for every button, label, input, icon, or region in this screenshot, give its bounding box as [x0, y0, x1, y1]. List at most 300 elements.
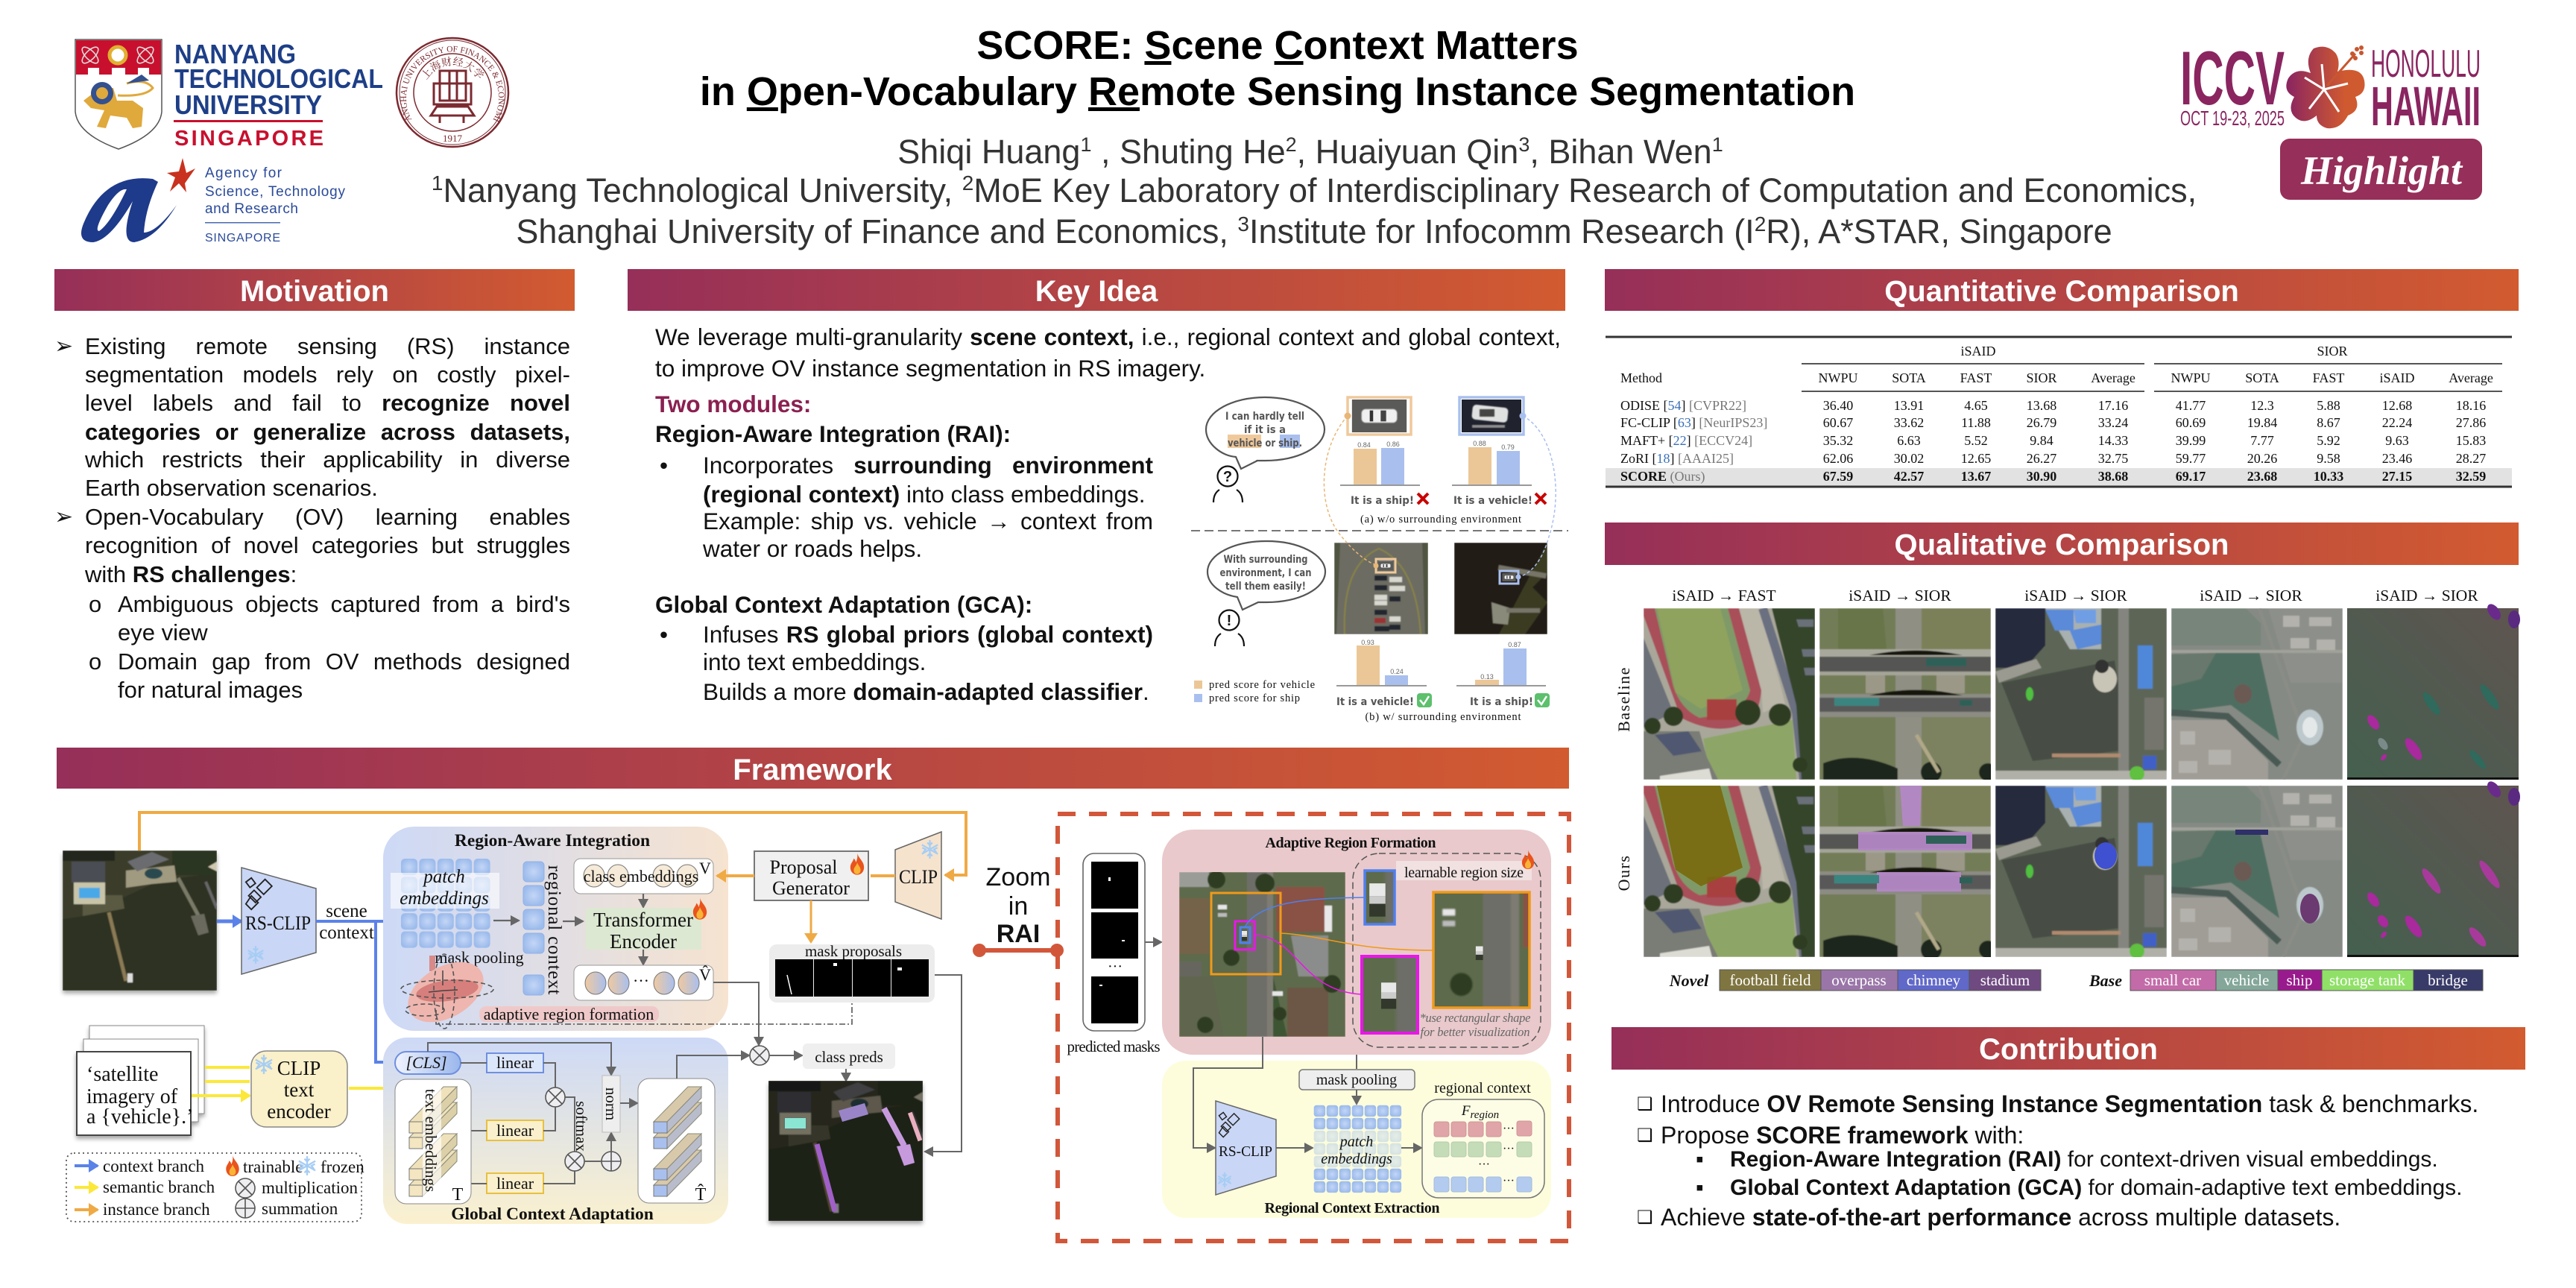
- icon: confident person: !: [1227, 613, 1231, 629]
- arrow: regional to transformer: [563, 921, 583, 922]
- bullet: open vocabulary: with RS challenges:: [85, 561, 297, 587]
- table row: SCORE: [1620, 469, 2486, 484]
- arrow: encoder to GCA: [349, 1087, 396, 1090]
- table row: FC-CLIP: 33.24: [2098, 415, 2128, 430]
- icon: multiply preds: [750, 1046, 769, 1065]
- table column heads: SIOR: [2026, 370, 2057, 385]
- icon: flame: [693, 897, 707, 920]
- table row: MAFT+: 5.52: [1964, 433, 1988, 448]
- table row: ZoRI: 20.26: [2247, 451, 2277, 466]
- table row: MAFT+: 14.33: [2098, 433, 2128, 448]
- ARF title: Adaptive Region Formation: [1266, 835, 1436, 851]
- legend: novel classes: chimney: [1907, 971, 1961, 989]
- legend: operators: summation: [262, 1199, 338, 1218]
- A*STAR mark: [81, 158, 195, 242]
- class embeddings: [574, 859, 713, 894]
- table row: FC-CLIP: 8.67: [2317, 415, 2340, 430]
- bullet: open vocabulary: ➢: [54, 504, 73, 530]
- ICCV wordmark: [2180, 36, 2481, 137]
- intro sentence: to improve OV instance segmentation in RS imagery.: [655, 355, 1205, 382]
- legend: operators: multiplication: [262, 1178, 359, 1197]
- table row: MAFT+: 15.83: [2456, 433, 2486, 448]
- table row: SCORE: 38.68: [2098, 469, 2128, 484]
- verdict: right predictions: It is a vehicle!: [1336, 696, 1414, 708]
- legend: base classes: vehicle: [2224, 971, 2269, 989]
- prompt text: [86, 1063, 193, 1128]
- GCA connectors: [461, 1063, 575, 1184]
- verdict: right predictions: It is a ship!: [1470, 696, 1533, 708]
- F region box: ···: [1503, 1143, 1515, 1155]
- bar chart: context, ship: [1456, 641, 1546, 686]
- table row: ODISE: 41.77: [2176, 398, 2206, 413]
- regional context label: regional context: [544, 865, 564, 995]
- table row: MAFT+: [1620, 433, 2486, 448]
- section header: Quantitative Comparison: Quantitative Comparison: [1884, 275, 2239, 308]
- arrow: proposal to masks: [809, 900, 812, 942]
- arrow: image to RS-CLIP: [217, 920, 242, 923]
- aerial image: [1179, 871, 1345, 1037]
- table row: ZoRI: 9.58: [2317, 451, 2340, 466]
- bullet: existing RS segmentation: which restricts their applicability in diverse: [85, 446, 570, 473]
- NTU wordmark: UNIVERSITY: [174, 89, 322, 120]
- norm block: norm: [602, 1087, 620, 1120]
- crop: medium region: [1201, 819, 1680, 1269]
- text embeddings T: T: [452, 1185, 464, 1205]
- legend: base classes: ship: [2286, 971, 2313, 989]
- arrows: mask pooling: [1356, 1055, 1357, 1104]
- table row: FC-CLIP: 60.69: [2176, 415, 2206, 430]
- row label: Ours: Ours: [1614, 855, 1633, 891]
- yellow arrows: prompt to encoder: [192, 1067, 250, 1096]
- context branch line: [316, 921, 397, 1062]
- linear block 3: [487, 1173, 543, 1193]
- logo: ICCV 2025 Honolulu Hawaii: [2180, 36, 2481, 137]
- speech bubble: hardly tell: I can hardly tell: [1225, 411, 1304, 423]
- predicted masks: [1067, 853, 1160, 1055]
- bullet: open vocabulary: recognition of novel categories but struggles: [85, 532, 570, 558]
- logo: Shanghai University of Finance and Economics seal: [395, 37, 510, 148]
- table column heads: NWPU: [1819, 370, 1857, 385]
- softmax label: softmax: [572, 1101, 590, 1152]
- icon: confident person: [1215, 610, 1244, 646]
- table column heads: [1620, 370, 2493, 385]
- table row: ODISE: 13.91: [1894, 398, 1924, 413]
- bullet: open vocabulary: Open-Vocabulary (OV) learning enables: [85, 504, 570, 530]
- speech bubble: hardly tell: if it is a: [1244, 424, 1286, 436]
- speech bubble: tell easily: [1208, 541, 1325, 610]
- CLIP text encoder: text: [284, 1079, 315, 1101]
- section header: Motivation: [54, 269, 575, 311]
- predicted masks: predicted masks: [1067, 1038, 1160, 1055]
- table row: MAFT+: MAFT+ [22] [ECCV24]: [1620, 433, 1752, 448]
- column heads: iSAID → SIOR: [2375, 587, 2478, 604]
- logo: Nanyang Technological University: [75, 39, 383, 151]
- bar chart: context, car: [1336, 639, 1427, 686]
- highlight badge: Highlight: [2300, 148, 2463, 193]
- GCA description: Infuses RS global priors (global context): [703, 621, 1153, 648]
- table row: FC-CLIP: 11.88: [1961, 415, 1991, 430]
- zoom in RAI label: in: [1008, 892, 1028, 921]
- RAI description: •: [660, 452, 668, 479]
- predicted masks: ···: [1108, 959, 1123, 975]
- dashed region-size frame: [1353, 853, 1541, 1047]
- table row: FC-CLIP: 33.62: [1894, 415, 1924, 430]
- regional context column: [523, 862, 544, 995]
- input image: [63, 850, 217, 991]
- legend: novel classes: overpass: [1831, 971, 1887, 989]
- speech bubble: tell easily: environment, I can: [1219, 567, 1312, 579]
- crop: large region: [1389, 860, 1620, 1096]
- icon: multiply 1: [546, 1087, 565, 1107]
- CLS token: [CLS]: [405, 1053, 447, 1072]
- legend: branches: semantic branch: [103, 1178, 215, 1196]
- table row: ODISE: [1620, 398, 2486, 413]
- patch embeddings grid: [1313, 1105, 1402, 1193]
- table row: ODISE: 4.65: [1964, 398, 1988, 413]
- panel: Region-Aware Integration: [383, 827, 728, 1035]
- table row: ZoRI: [1620, 451, 2486, 466]
- column heads: iSAID → SIOR: [2200, 587, 2302, 604]
- table row: ODISE: 12.3: [2250, 398, 2274, 413]
- table row: ODISE: 18.16: [2456, 398, 2486, 413]
- table column heads: NWPU: [2171, 370, 2211, 385]
- table row: ODISE: 13.68: [2027, 398, 2056, 413]
- arrow: patches to regional: [1401, 1147, 1421, 1149]
- highlight badge: [2280, 139, 2482, 200]
- linear block 1: [487, 1053, 543, 1073]
- linear block 2: [487, 1120, 543, 1140]
- A*STAR wordmark: [205, 165, 346, 244]
- affiliations: [432, 171, 2197, 250]
- patch embeddings grid: patch: [422, 867, 465, 887]
- legend: branches: context branch: [103, 1157, 205, 1175]
- CLIP text encoder: encoder: [267, 1100, 331, 1123]
- NTU shield: [75, 40, 162, 149]
- table row: SCORE: 42.57: [1894, 469, 1924, 484]
- table row: ODISE: 12.68: [2382, 398, 2412, 413]
- chart legend: pred score for vehicle: [1209, 679, 1315, 691]
- RAI description: Region-Aware Integration (RAI):: [655, 420, 1011, 447]
- adapted embeddings: [574, 965, 713, 1000]
- sub-item: GCA: Global Context Adaptation (GCA) for domain-adaptive text embeddings.: [1730, 1175, 2463, 1200]
- bar chart: context, car: 0.93: [1361, 639, 1374, 646]
- A*STAR wordmark: SINGAPORE: [205, 232, 280, 244]
- icon: flame: [1522, 850, 1534, 869]
- verdict: wrong predictions: It is a vehicle!: [1453, 495, 1532, 507]
- legend: trainable and frozen: trainable: [243, 1158, 303, 1176]
- line: image to RS-CLIP: [1193, 1037, 1263, 1148]
- item: framework: Propose SCORE framework with:: [1661, 1122, 2024, 1149]
- table row: MAFT+: 39.99: [2176, 433, 2206, 448]
- table group heads: [1960, 344, 2348, 359]
- GCA description: Global Context Adaptation (GCA):: [655, 591, 1032, 618]
- logo: A*STAR: [81, 158, 346, 244]
- norm block: [602, 1076, 620, 1132]
- zoom in RAI label: RAI: [997, 920, 1040, 948]
- legend: novel classes: Novel: [1669, 971, 1709, 990]
- icon: puzzled person: [1213, 467, 1243, 502]
- table row: ZoRI: 30.02: [1894, 451, 1924, 466]
- speech bubble: tell easily: With surrounding: [1224, 554, 1307, 566]
- table row: SCORE: 13.67: [1961, 469, 1991, 484]
- crop: small region: [1177, 676, 1688, 1246]
- panel: Motivation text: [54, 333, 570, 703]
- adapted text embeddings: T̂: [695, 1184, 707, 1205]
- bar chart: context, ship: 0.13: [1480, 673, 1494, 681]
- zoom in RAI label: Zoom: [986, 863, 1050, 891]
- verdict: wrong predictions: [1351, 493, 1546, 507]
- item: performance: ❑: [1637, 1207, 1653, 1228]
- section header: Quantitative Comparison: [1605, 269, 2519, 311]
- proposal generator: Generator: [772, 877, 850, 899]
- caption a: (a) w/o surrounding environment: [1360, 514, 1521, 525]
- GCA title: Global Context Adaptation: [451, 1205, 654, 1224]
- table row: ZoRI: ZoRI [18] [AAAI25]: [1620, 451, 1734, 466]
- verdict: wrong predictions: It is a ship!: [1351, 495, 1414, 507]
- NTU wordmark: SINGAPORE: [174, 127, 323, 151]
- sub-bullets: o: [89, 591, 101, 617]
- intro sentence: [655, 323, 1561, 382]
- sub-bullets: Domain gap from OV methods designed: [118, 648, 570, 675]
- table row: FC-CLIP: 27.86: [2456, 415, 2486, 430]
- F region box: F: [1462, 1103, 1470, 1119]
- class preds: [803, 1044, 895, 1069]
- divider: [1191, 530, 1568, 531]
- proposal generator: Proposal: [769, 856, 838, 878]
- legend: trainable and frozen: frozen: [321, 1158, 364, 1176]
- baseline images: [1644, 602, 2520, 783]
- bullet: existing RS segmentation: [54, 333, 570, 501]
- arrow: to class preds: [769, 1055, 802, 1056]
- chart legend: pred score for ship: [1209, 692, 1300, 704]
- section header: Framework: Framework: [733, 754, 892, 786]
- affiliations: 1Nanyang Technological University, 2MoE Key Laboratory of Interdisciplinary Research of Computation and Economics,: [432, 171, 2197, 209]
- arrow: masks to ARF: [1145, 941, 1161, 943]
- table column heads: SOTA: [2245, 370, 2279, 385]
- bar chart: no context, ship: [1452, 440, 1532, 486]
- sub-bullets: for natural images: [118, 677, 303, 703]
- title: SCORE: Scene Context Matters: [976, 23, 1579, 68]
- prompt text: ‘satellite: [86, 1063, 158, 1086]
- prompt text: imagery of: [86, 1085, 178, 1108]
- F region box: ···: [1503, 1175, 1515, 1187]
- prompt text: a {vehicle}.’: [86, 1105, 193, 1128]
- arrow: transformer to V hat: [643, 950, 644, 965]
- bar chart: no context, car: [1340, 441, 1420, 486]
- speech bubble: hardly tell: [1206, 397, 1325, 469]
- qualitative comparison grid: [1614, 587, 2520, 991]
- authors: Shiqi Huang1 , Shuting He2, Huaiyuan Qin3, Bihan Wen1: [897, 133, 1723, 171]
- line: V hat to multiply: [713, 982, 759, 1045]
- icon: sum: [602, 1152, 621, 1171]
- legend: novel classes: football field: [1729, 971, 1811, 989]
- bar chart: no context, ship: 0.79: [1501, 443, 1515, 451]
- adaptive region sketch: [397, 950, 494, 1035]
- bullet: open vocabulary: [54, 504, 570, 587]
- legend: base classes: storage tank: [2329, 971, 2406, 989]
- CLIP text encoder: CLIP: [277, 1057, 321, 1079]
- table column heads: Method: [1620, 370, 1662, 385]
- table row: SCORE: 32.59: [2456, 469, 2486, 484]
- CLIP encoder: [895, 832, 941, 919]
- table row: ZoRI: 26.27: [2027, 451, 2056, 466]
- table row: MAFT+: 6.63: [1897, 433, 1921, 448]
- RS-CLIP encoder: RS-CLIP: [245, 912, 311, 934]
- table row: ZoRI: 23.46: [2382, 451, 2412, 466]
- table row: FC-CLIP: [1620, 415, 2486, 430]
- column heads: [1672, 587, 2478, 604]
- A*STAR wordmark: Agency for: [205, 165, 282, 181]
- zoom connector: [973, 944, 1064, 957]
- F region box: region: [1470, 1109, 1499, 1121]
- legend: [66, 1153, 364, 1222]
- table row: MAFT+: 9.63: [2385, 433, 2409, 448]
- table row: MAFT+: 7.77: [2250, 433, 2274, 448]
- regional context label: regional context: [1434, 1080, 1531, 1096]
- arrow: norm to T hat: [620, 1102, 637, 1104]
- speech bubble: tell easily: tell them easily!: [1225, 581, 1306, 593]
- table column heads: Average: [2091, 370, 2135, 385]
- arrow: preds to output: [845, 1069, 847, 1081]
- text embeddings T: [395, 1079, 471, 1205]
- class embeddings: class embeddings: [584, 867, 698, 886]
- GCA description: Builds a more domain-adapted classifier.: [703, 678, 1149, 705]
- table row: ZoRI: 12.65: [1961, 451, 1991, 466]
- RAI description: Example: ship vs. vehicle → context from: [703, 508, 1153, 534]
- arrow: RS-CLIP to patches: [1276, 1147, 1313, 1149]
- sub-bullets: o: [89, 648, 101, 675]
- icon: multiply 2: [565, 1152, 584, 1171]
- sub-bullets: Ambiguous objects captured from a bird's: [118, 591, 570, 617]
- NTU wordmark: [174, 39, 383, 151]
- sub-item: RAI: Region-Aware Integration (RAI) for context-driven visual embeddings.: [1730, 1147, 2438, 1172]
- legend: novel classes: [1669, 970, 2041, 991]
- patch embeddings grid: embeddings: [1321, 1151, 1392, 1167]
- item: task and benchmarks: Introduce OV Remote Sensing Instance Segmentation task & benchmarks.: [1661, 1090, 2478, 1117]
- sub-bullets: eye view: [118, 619, 208, 645]
- F region box: [1422, 1099, 1544, 1198]
- logo: Shanghai University of Finance and Economics seal: 上海财经大学: [422, 57, 484, 80]
- class preds: class preds: [815, 1048, 883, 1066]
- GCA description: into text embeddings.: [703, 648, 926, 675]
- comparison table: [1606, 337, 2512, 487]
- table row: ODISE: 5.88: [2317, 398, 2340, 413]
- patch embeddings grid: [391, 858, 499, 949]
- sub-bullets: [89, 591, 570, 703]
- table row: SCORE: 69.17: [2176, 469, 2206, 484]
- CLIP encoder: CLIP: [899, 866, 938, 888]
- text embeddings T: text embeddings: [422, 1089, 440, 1192]
- ICCV wordmark: OCT 19-23, 2025: [2180, 107, 2285, 130]
- legend: trainable and frozen: [226, 1155, 364, 1176]
- table row: SCORE: 27.15: [2382, 469, 2412, 484]
- column heads: iSAID → SIOR: [1849, 587, 1951, 604]
- table row: FC-CLIP: 22.24: [2382, 415, 2412, 430]
- section header: Contribution: [1611, 1027, 2525, 1070]
- section header: Contribution: Contribution: [1979, 1033, 2158, 1066]
- bar chart: context, car: 0.24: [1390, 668, 1404, 675]
- bar chart: no context, car: 0.84: [1357, 441, 1371, 449]
- section header: Qualitative Comparison: [1605, 523, 2519, 565]
- bullet: existing RS segmentation: Earth observation scenarios.: [85, 475, 378, 501]
- section header: Motivation: Motivation: [240, 275, 389, 308]
- GCA description: •: [660, 621, 668, 648]
- bullet: existing RS segmentation: level labels and fail to recognize novel: [85, 390, 570, 416]
- item: task and benchmarks: ❑: [1637, 1093, 1653, 1114]
- line: masks to output: [925, 975, 962, 1152]
- visualization note: for better visualization: [1421, 1025, 1530, 1039]
- dashed link: vehicle crop to scene: [1324, 416, 1376, 565]
- mask pooling box: [1299, 1070, 1415, 1090]
- panel: Adaptive Region Formation: [1162, 676, 1688, 1269]
- affiliations: Shanghai University of Finance and Economics, 3Institute for Infocomm Research (I2R), A*STAR, Singapore: [516, 212, 2112, 250]
- legend: base classes: Base: [2089, 971, 2122, 990]
- scene context label: context: [319, 923, 374, 943]
- row label: Baseline: Baseline: [1614, 666, 1633, 732]
- RAI description: [655, 420, 1153, 562]
- F region box: ···: [1478, 1158, 1490, 1171]
- RS-CLIP encoder: RS-CLIP: [1219, 1143, 1272, 1160]
- instance branch top line: [139, 812, 966, 875]
- crop: ship as vehicle: [1459, 397, 1527, 435]
- sub-item: GCA: ▪: [1696, 1175, 1704, 1200]
- table row: SCORE: 67.59: [1823, 469, 1853, 484]
- SCORE images: [1644, 779, 2520, 960]
- section header: Key Idea: [628, 269, 1565, 311]
- dash-dot mask line: [436, 1003, 852, 1024]
- table group heads: iSAID: [1960, 344, 1996, 359]
- GCA description: [655, 591, 1153, 705]
- linear block 1: linear: [496, 1053, 534, 1072]
- arrows: instance branch: [717, 874, 895, 877]
- table row: MAFT+: 9.84: [2030, 433, 2053, 448]
- region boxes: [1211, 893, 1281, 974]
- mask pooling label: mask pooling: [435, 948, 524, 967]
- mask pooling box: mask pooling: [1316, 1072, 1397, 1088]
- table row: ZoRI: 28.27: [2456, 451, 2486, 466]
- mask proposals: [769, 942, 935, 1003]
- image: harbour: [1454, 543, 1547, 634]
- RAI description: Incorporates surrounding environment: [703, 452, 1153, 479]
- table column heads: FAST: [2313, 370, 2344, 385]
- two modules heading: Two modules:: [655, 391, 811, 417]
- legend: branches: instance branch: [103, 1200, 210, 1219]
- panel: Contribution text: [1637, 1090, 2478, 1231]
- RAI description: water or roads helps.: [703, 535, 922, 562]
- F region box: ···: [1503, 1123, 1515, 1135]
- item: performance: Achieve state-of-the-art performance across multiple datasets.: [1661, 1204, 2340, 1231]
- table column heads: FAST: [1960, 370, 1992, 385]
- adapted embeddings: V̂: [699, 965, 711, 984]
- class embeddings: V: [699, 859, 711, 877]
- sub-item: RAI: ▪: [1696, 1147, 1704, 1172]
- table row: MAFT+: 35.32: [1823, 433, 1853, 448]
- crop links: [1245, 897, 1433, 994]
- table row: ZoRI: 62.06: [1823, 451, 1853, 466]
- visualization note: *use rectangular shape: [1419, 1011, 1531, 1025]
- ICCV wordmark: ICCV: [2180, 36, 2285, 121]
- CLIP text encoder: [251, 1051, 347, 1127]
- table column heads: iSAID: [2379, 370, 2415, 385]
- linear block 2: linear: [496, 1121, 534, 1140]
- RAI description: (regional context) into class embeddings.: [703, 481, 1145, 508]
- scene context label: scene: [326, 901, 367, 921]
- title: in Open-Vocabulary Remote Sensing Instance Segmentation: [700, 69, 1855, 114]
- RAI title: Region-Aware Integration: [455, 831, 650, 850]
- column heads: iSAID → FAST: [1672, 587, 1776, 604]
- table row: ZoRI: 32.75: [2098, 451, 2128, 466]
- legend: branches: [75, 1157, 215, 1219]
